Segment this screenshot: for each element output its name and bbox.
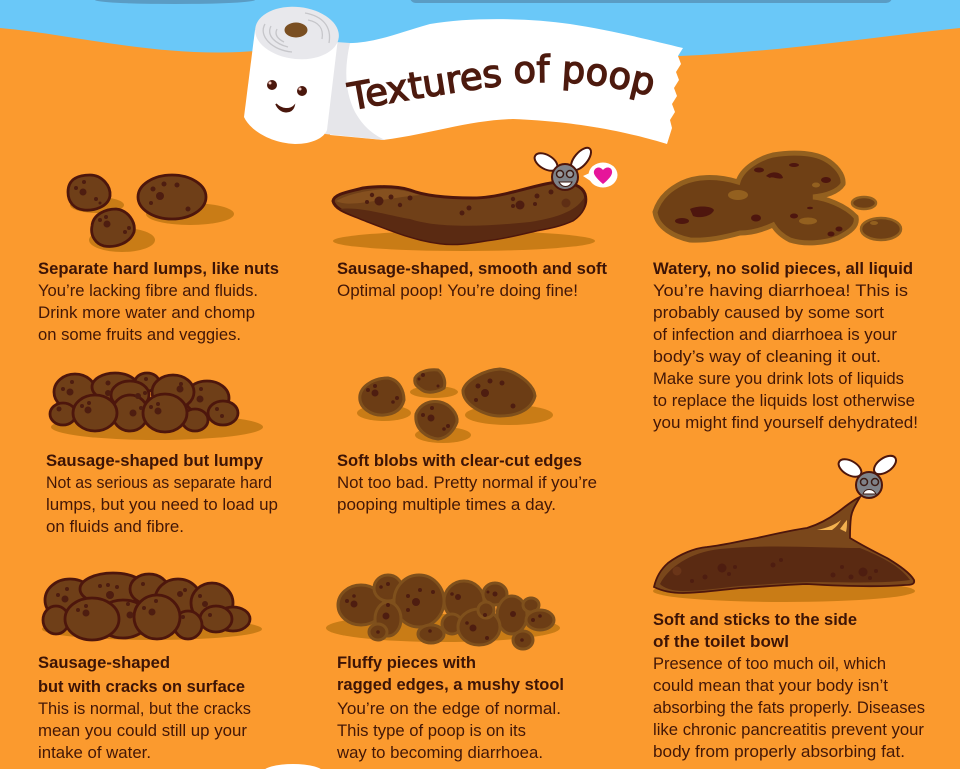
poop 7: fluffy pieces [326, 575, 560, 649]
text: sticky: Presence of too much oil, which [653, 654, 886, 673]
text: soft blobs: Not too bad. Pretty normal if you’re [337, 473, 597, 492]
paper fold shadow [325, 42, 385, 140]
chunks [675, 163, 842, 236]
poop 4: lumpy sausage [50, 373, 263, 440]
text: lumpy sausage [46, 451, 278, 536]
title text: Textures of poop [346, 53, 654, 110]
poop 5: soft blobs [357, 369, 553, 443]
text: watery [653, 259, 918, 432]
head [552, 164, 578, 190]
text: sausage with cracks: intake of water. [38, 743, 151, 762]
text: watery: to replace the liquids lost otherwise [653, 391, 915, 410]
frown [863, 490, 876, 494]
text: watery: you might find yourself dehydrated! [653, 413, 918, 432]
heart [594, 168, 612, 184]
sky [0, 0, 960, 57]
roll rings [263, 13, 330, 52]
shadow [326, 614, 560, 642]
text: watery: body’s way of cleaning it out. [653, 347, 881, 366]
poop 1: separate hard lumps [68, 175, 234, 252]
text: sticky: body from properly absorbing fat. [653, 742, 905, 761]
roll body [244, 30, 338, 144]
text: sausage smooth: Optimal poop! You’re doing fine! [337, 281, 578, 300]
shadows [357, 386, 553, 443]
head [856, 472, 882, 498]
top left pool edge [95, 0, 255, 4]
text: sticky: absorbing the fats properly. Diseases [653, 698, 925, 717]
poop 6: sausage with cracks [42, 573, 262, 640]
text: lumpy sausage: Sausage-shaped but lumpy [46, 451, 264, 470]
text: fluffy pieces: Fluffy pieces with [337, 653, 476, 672]
poop 2: sausage smooth [333, 144, 618, 251]
roll eyes [267, 80, 307, 96]
text: fluffy pieces: ragged edges, a mushy stool [337, 675, 564, 694]
roll hole [284, 22, 308, 38]
shadow [653, 580, 915, 602]
text: watery: of infection and diarrhoea is your [653, 325, 897, 344]
smear [654, 497, 914, 593]
text: sticky: could mean that your body isn’t [653, 676, 888, 695]
title banner: toilet paper roll [244, 6, 683, 144]
shadow [333, 231, 595, 251]
strand highlights [817, 520, 847, 532]
text: separate hard lumps: on some fruits and veggies. [38, 325, 241, 344]
spots [56, 582, 212, 619]
text: sausage with cracks: This is normal, but the cracks [38, 699, 251, 718]
text: sausage smooth [337, 259, 607, 300]
blobs [360, 369, 535, 439]
text: sausage with cracks: Sausage-shaped [38, 653, 170, 672]
text: sticky [653, 610, 925, 761]
text: fluffy pieces: way to becoming diarrhoea. [336, 743, 543, 762]
text: fluffy pieces [336, 653, 564, 762]
pieces [338, 575, 554, 649]
text: fluffy pieces: You’re on the edge of normal. [337, 699, 561, 718]
sausage top highlight [336, 189, 420, 204]
smile [559, 182, 572, 186]
spots [56, 377, 224, 418]
happy fly [532, 144, 595, 190]
sausage [333, 182, 586, 244]
small drops [852, 197, 901, 240]
pale patches [728, 182, 878, 225]
spots [74, 180, 190, 234]
text: sticky: Soft and sticks to the side [653, 610, 857, 629]
eyes [556, 170, 574, 178]
roll smile [276, 104, 294, 112]
poop 3: watery [655, 153, 901, 243]
text: lumpy sausage: Not as serious as separate hard [46, 473, 272, 492]
text: separate hard lumps: You’re lacking fibre and fluids. [38, 281, 258, 300]
text: lumpy sausage: on fluids and fibre. [46, 517, 184, 536]
text: separate hard lumps [38, 259, 279, 344]
lumps [43, 573, 250, 640]
sausage underside [340, 198, 585, 244]
text: sausage with cracks: but with cracks on surface [38, 677, 245, 696]
text: sticky: of the toilet bowl [653, 632, 789, 651]
text: soft blobs [337, 451, 597, 514]
top sign edge [410, 0, 892, 3]
eyes [860, 478, 878, 486]
spots [365, 190, 570, 216]
text: sticky: like chronic pancreatitis prevent your [653, 720, 924, 739]
spots [366, 373, 516, 431]
text: sausage with cracks [38, 653, 251, 762]
text: sausage with cracks: mean you could still up your [38, 721, 247, 740]
shadow [42, 618, 262, 640]
spots [345, 582, 542, 642]
text: soft blobs: Soft blobs with clear-cut edges [337, 451, 582, 470]
text: watery: You’re having diarrhoea! This is [653, 281, 908, 300]
text: watery: probably caused by some sort [653, 303, 884, 322]
roll eye glints [268, 82, 302, 90]
lumps [50, 373, 238, 432]
text: separate hard lumps: Drink more water and chomp [38, 303, 255, 322]
text: watery: Make sure you drink lots of liquids [653, 369, 904, 388]
shadows [70, 197, 234, 252]
lumps [68, 175, 206, 246]
puddle [655, 153, 856, 243]
paper strip [330, 19, 683, 144]
roll top [253, 3, 341, 63]
shadow [51, 414, 263, 440]
wings [532, 144, 595, 174]
text: sausage smooth: Sausage-shaped, smooth and soft [337, 259, 607, 278]
text: watery: Watery, no solid pieces, all liquid [653, 259, 913, 278]
text: soft blobs: pooping multiple times a day. [337, 495, 556, 514]
poop 8: sticky [653, 452, 915, 602]
spots [672, 558, 878, 583]
text: fluffy pieces: This type of poop is on its [337, 721, 526, 740]
heart speech bubble [583, 162, 618, 188]
worried fly [836, 452, 899, 498]
text: separate hard lumps: Separate hard lumps, like nuts [38, 259, 279, 278]
bottom white shape [263, 764, 323, 769]
underside [660, 546, 910, 591]
text: lumpy sausage: lumps, but you need to load up [46, 495, 278, 514]
wings [836, 452, 899, 480]
